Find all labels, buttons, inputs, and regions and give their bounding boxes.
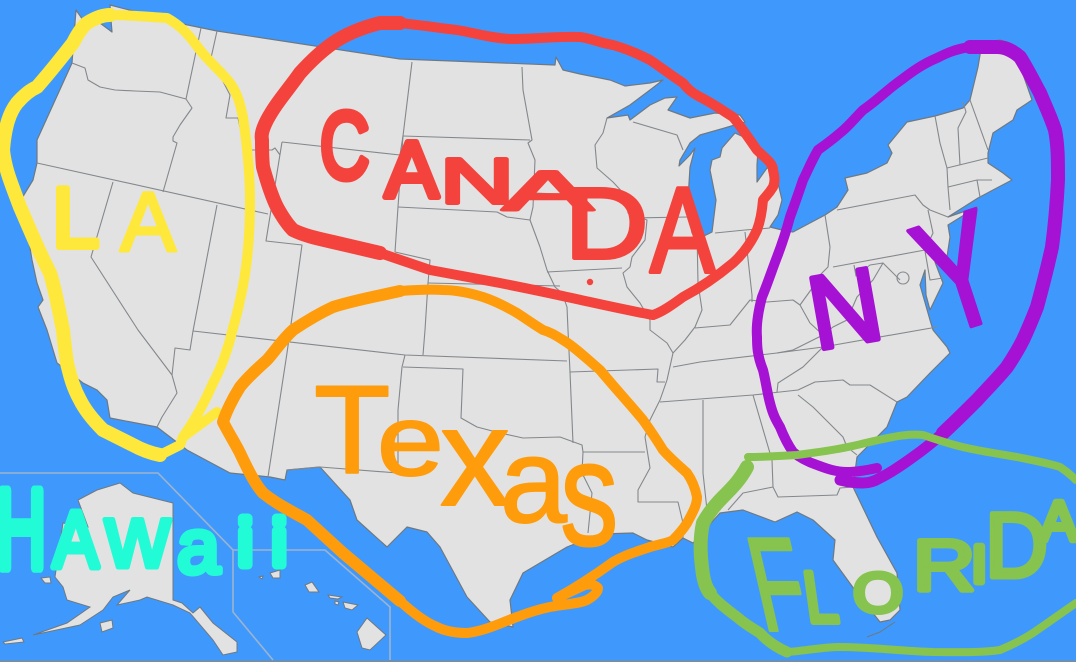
label: NY: N bbox=[800, 246, 890, 372]
label: FLORIDA: D bbox=[985, 495, 1048, 598]
callout loop: green around Florida bbox=[701, 435, 1076, 652]
label: LA: A bbox=[120, 175, 176, 269]
small red dot bbox=[587, 279, 593, 285]
label: FLORIDA: O bbox=[853, 561, 903, 624]
Florida Keys bbox=[867, 622, 895, 637]
label: Texas: T bbox=[314, 361, 390, 500]
label: CANADA: D bbox=[565, 167, 648, 279]
inset frames: Alaska and Hawaii bbox=[0, 473, 390, 660]
label: Hawaii bbox=[0, 467, 286, 592]
label: CANADA: A bbox=[650, 163, 715, 299]
callout loop: orange around Texas bbox=[223, 290, 697, 633]
callout loop: red around the northern plains bbox=[262, 23, 775, 315]
label: Hawaii: ii bbox=[238, 506, 286, 579]
callout loop: purple around the Northeast bbox=[757, 47, 1058, 483]
label: Texas: a bbox=[500, 414, 567, 548]
label: CANADA: C bbox=[320, 92, 369, 199]
label: CANADA: N bbox=[440, 146, 514, 217]
callout loop: yellow around the West Coast bbox=[3, 15, 250, 455]
label: FLORIDA: R bbox=[913, 525, 975, 605]
label: NY: Y bbox=[895, 175, 1023, 369]
label: CANADA: A bbox=[503, 159, 593, 222]
label: NY bbox=[800, 175, 1023, 372]
label: LA: L bbox=[52, 171, 99, 266]
label: Texas: s bbox=[560, 409, 618, 577]
label: FLORIDA bbox=[735, 489, 1076, 658]
label: Hawaii: A bbox=[53, 495, 99, 584]
label: FLORIDA: L bbox=[799, 557, 842, 637]
label: CANADA: A bbox=[385, 125, 439, 214]
map: Alaska bbox=[3, 483, 237, 655]
label: FLORIDA: F bbox=[735, 511, 820, 658]
label: Hawaii: a bbox=[177, 504, 220, 590]
state borders bbox=[37, 28, 992, 538]
label: Hawaii: w bbox=[104, 487, 171, 587]
label: CANADA bbox=[320, 92, 715, 299]
label: FLORIDA: I bbox=[972, 536, 986, 594]
label: Texas bbox=[314, 361, 618, 577]
label: LA bbox=[52, 171, 176, 269]
label: Texas: x bbox=[440, 378, 510, 535]
map: Hawaii bbox=[259, 570, 386, 650]
label: Texas: e bbox=[377, 385, 444, 497]
